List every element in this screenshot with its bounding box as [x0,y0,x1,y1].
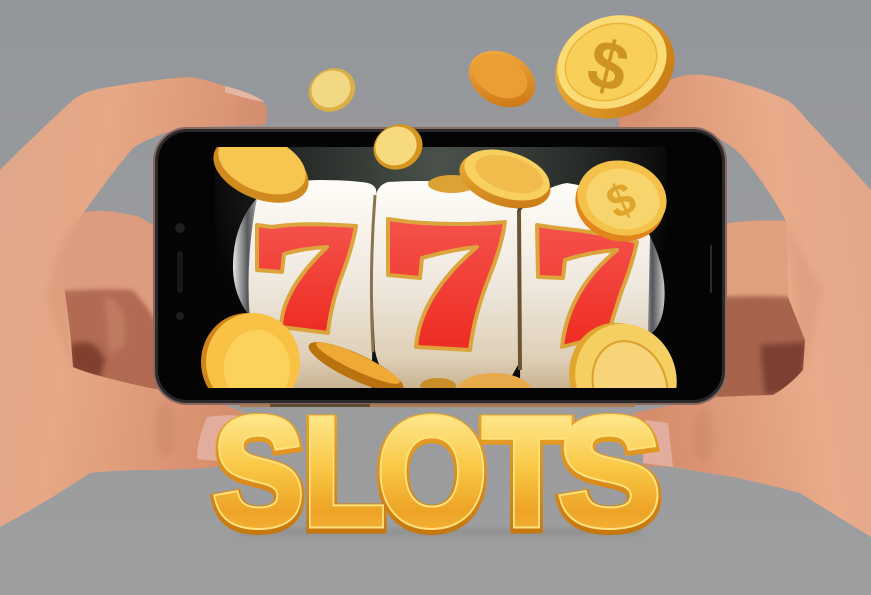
seven 2 [388,219,505,350]
right hand back fingers [715,220,805,398]
phone bottom edge [240,404,635,407]
title outer edge: T [483,388,570,560]
reel 2 [373,181,518,388]
dollar sign: $ [580,25,636,107]
seven 3 [537,225,637,347]
reel 1 [249,180,376,388]
title outer edge: O [377,388,487,560]
right hand [618,75,871,537]
icon: screen dollar coin [575,160,667,242]
title face: S [558,386,661,558]
icon: floating coin small [301,60,363,120]
title outer edge [213,388,661,560]
phone sensor [176,312,184,320]
title highlight outline [213,386,661,558]
title highlight outline: S [213,386,304,558]
icon: screen coin top left [213,147,309,203]
title highlight outline: O [377,386,487,558]
icon: screen coin small edge [428,175,470,193]
slot machine reels [201,147,677,388]
icon: screen coin bottom centre [420,373,531,388]
phone speaker [177,251,183,293]
reel 3 [520,183,650,388]
title outer edge: L [303,388,385,560]
title face: T [483,386,570,558]
left silver rim [232,199,257,313]
title face: L [303,386,385,558]
title highlight outline: S [558,386,661,558]
title highlight outline: T [483,386,570,558]
title highlight outline: L [303,386,385,558]
phone [153,127,727,405]
screen dollar sign: $ [598,171,644,229]
right thumb nail [643,420,673,467]
seven 1 [257,224,356,333]
left hand back fingers [62,210,158,390]
right silver rim [648,234,665,334]
title outer edge: S [558,388,661,560]
SLOTS title [213,386,661,560]
left thumb nail [197,415,243,462]
icon: screen coin bottom tilted [308,342,404,388]
phone camera [175,223,185,233]
reel separators [371,195,375,352]
icon: floating coin orange [459,40,545,118]
icon: screen coin centre [459,150,551,208]
title face: O [377,386,487,558]
title shadow [240,529,640,535]
phone screen [215,147,666,388]
icon: screen coin top [366,116,430,178]
icon: screen coin bottom left [201,313,300,388]
title outer edge: S [213,388,304,560]
title face: S [213,386,304,558]
icon: floating dollar coin [540,0,690,136]
left index nail [225,86,265,102]
phone side notch [710,245,712,293]
left hand [0,77,270,527]
title face [213,386,661,558]
icon: screen coin bottom right [569,322,677,388]
